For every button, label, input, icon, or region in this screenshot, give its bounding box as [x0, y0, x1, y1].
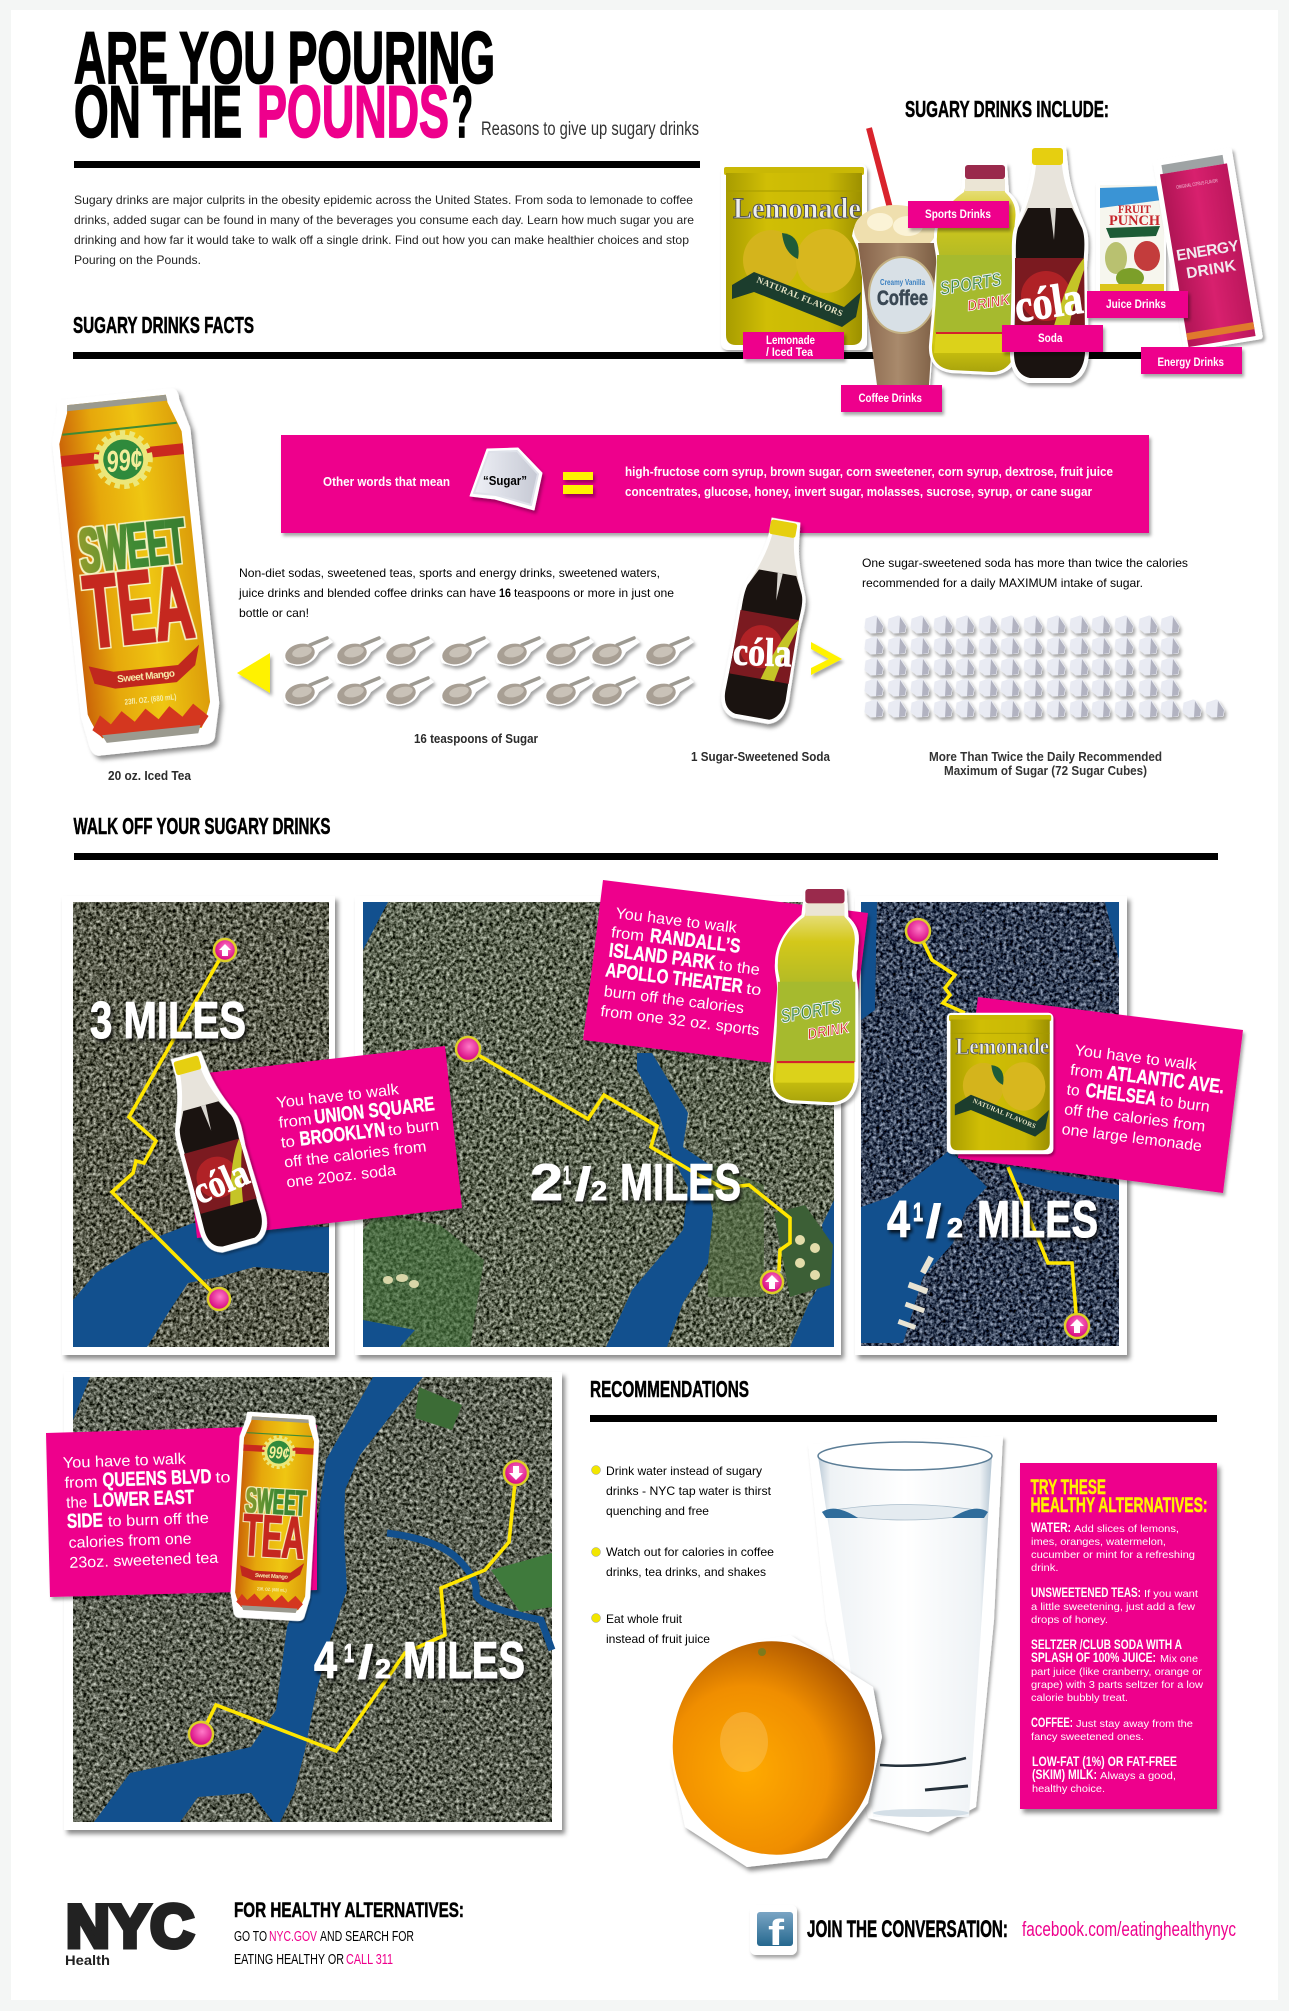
text: teaspoons explanation: juice drinks and blended coffee drinks can have — [238, 586, 496, 600]
label: coffee drinks: Coffee Drinks — [858, 391, 922, 405]
text: teaspoons explanation: bottle or can! — [239, 606, 309, 620]
distance: 4 1/2 miles (lemonade) — [887, 1191, 1098, 1249]
callout: atlantic ave — [958, 997, 1243, 1193]
pin: start — [214, 939, 236, 961]
heading: try these — [1030, 1476, 1208, 1517]
pin: end — [189, 1722, 213, 1746]
bullet: whole fruit: instead of fruit juice — [606, 1632, 710, 1646]
callout: union square: from — [278, 1111, 313, 1132]
callout: randall's island: You have to walk — [615, 905, 738, 937]
route line — [207, 1473, 516, 1751]
label: energy drinks: Energy Drinks — [1158, 355, 1224, 369]
intro text: Sugary drinks are major culprits in the obesity epidemic across the United States. From soda to lemonade to coffee — [74, 194, 693, 207]
icon: large sweet tea can — [48, 387, 223, 757]
text: teaspoons explanation — [238, 566, 674, 620]
icon: sweet tea can on map: SWEET — [244, 1481, 307, 1523]
footer: healthy alternatives: AND SEARCH FOR — [320, 1928, 414, 1945]
footer: healthy alternatives: GO TO — [234, 1928, 267, 1945]
distance: 2 1/2 miles: / — [575, 1158, 591, 1210]
callout: randall's island: from one 32 oz. sports — [599, 1003, 761, 1039]
callout: queens blvd: from — [64, 1474, 98, 1492]
distance: 4 1/2 miles (lemonade): MILES — [977, 1191, 1098, 1249]
icon: cola bottle — [1010, 146, 1089, 383]
pin: end — [208, 1288, 230, 1310]
icon: juice box: FRUIT — [1118, 202, 1151, 216]
icon: sports drink on map: DRINK — [806, 1019, 851, 1043]
intro text: drinking and how far it would take to walk off a single drink. Find out how you can make healthier choices and stop — [74, 234, 689, 247]
icon: sugar cube with label: “Sugar” — [483, 473, 527, 488]
icon: facebook — [750, 1905, 797, 1955]
caption: 1 soda: 1 Sugar-Sweetened Soda — [691, 749, 831, 764]
label: coffee drinks — [841, 385, 942, 412]
icon: cola bottle on map — [155, 1048, 271, 1255]
text: unsweetened teas: drops of honey. — [1031, 1614, 1108, 1626]
panel: other words for sugar: Other words that mean — [323, 474, 450, 489]
text: teaspoons explanation: teaspoons or more in just one — [514, 586, 674, 600]
text: water: drink. — [1031, 1562, 1058, 1574]
arrow: greater-than sign — [811, 642, 842, 675]
callout: randall's island: ISLAND PARK — [608, 940, 717, 975]
text: sugar synonyms: high-fructose corn syrup, brown sugar, corn sweetener, corn syrup, dextrose, fruit juice — [625, 464, 1113, 479]
distance: 4 1/2 miles (lemonade): 4 — [887, 1191, 910, 1249]
callout: atlantic ave: You have to walk — [1074, 1042, 1198, 1074]
icon: energy drink: ENERGY — [1175, 238, 1241, 265]
icon: large sweet tea can: 99¢ — [105, 443, 144, 479]
panel: try these healthy alternatives — [1020, 1463, 1217, 1809]
text: soda explanation: recommended for a daily MAXIMUM intake of sugar. — [862, 576, 1143, 590]
icon: large sweet tea can: Sweet Mango — [117, 668, 176, 685]
callout: atlantic ave: CHELSEA — [1084, 1080, 1158, 1110]
callout: queens blvd: the — [66, 1494, 88, 1512]
distance: 4 1/2 miles (tea): 2 — [375, 1654, 391, 1684]
icon: cola bottle (sugar comparison): cóla — [732, 629, 792, 675]
text: water: WATER: — [1031, 1519, 1071, 1535]
heading: sugary drinks facts: SUGARY DRINKS FACTS — [73, 312, 254, 338]
bullet: drink water: Drink water instead of sugary — [606, 1464, 762, 1478]
icon: sugar cube with label — [470, 448, 542, 510]
icons: 16 teaspoons of sugar — [283, 635, 694, 707]
footer: join the conversation: JOIN THE CONVERSATION: — [807, 1916, 1008, 1943]
callout: union square: BROOKLYN — [298, 1119, 386, 1151]
icon: sports drink on map — [770, 887, 859, 1105]
panel: other words for sugar — [281, 435, 1149, 533]
callout: queens blvd: QUEENS BLVD — [102, 1466, 212, 1492]
icon: coffee drink — [852, 128, 942, 385]
text: seltzer — [1031, 1636, 1203, 1704]
distance: 4 1/2 miles (tea): / — [358, 1636, 373, 1688]
icon: sweet tea can on map — [229, 1411, 321, 1622]
icon: sports drink on map: SPORTS — [779, 997, 843, 1028]
icon: glass of water — [808, 1436, 1003, 1832]
title: POUNDS — [257, 72, 449, 153]
intro text — [74, 194, 694, 267]
icon: sports drink: SPORTS — [938, 269, 1003, 300]
label: soda — [1002, 325, 1103, 352]
text: milk: Always a good, — [1100, 1770, 1176, 1782]
callout: union square: UNION SQUARE — [313, 1093, 436, 1129]
bullet: drink water — [592, 1464, 772, 1518]
text: coffee — [1031, 1714, 1193, 1743]
icon: juice box: PUNCH — [1109, 213, 1160, 229]
icon: facebook: f — [768, 1912, 785, 1953]
label: energy drinks — [1141, 347, 1242, 374]
callout: union square: You have to walk — [276, 1081, 400, 1112]
recommendations rule — [590, 1415, 1217, 1422]
walk off rule — [74, 853, 1218, 860]
callout: atlantic ave: one large lemonade — [1061, 1121, 1203, 1155]
distance: 4 1/2 miles (tea): 1 — [344, 1638, 354, 1668]
text: water: Add slices of lemons, — [1074, 1523, 1179, 1535]
callout: atlantic ave: to burn — [1159, 1093, 1211, 1116]
distance: 2 1/2 miles: 1 — [563, 1160, 571, 1190]
icon: lemonade can on map: NATURAL FLAVORS — [972, 1098, 1037, 1131]
callout: union square: off the calories from — [283, 1138, 427, 1171]
footer: healthy alternatives: EATING HEALTHY OR — [234, 1951, 344, 1968]
callout: union square: one 20oz. soda — [286, 1162, 397, 1191]
callout: randall's island — [583, 880, 868, 1072]
icon: equals sign — [563, 472, 593, 494]
distance: 2 1/2 miles: 2 — [530, 1154, 563, 1212]
icons: 72 sugar cubes — [865, 616, 1224, 717]
text: coffee: Just stay away from the — [1076, 1718, 1193, 1730]
footer: healthy alternatives: FOR HEALTHY ALTERNATIVES: — [234, 1899, 464, 1922]
bullet: drink water: drinks - NYC tap water is thirst — [606, 1484, 772, 1498]
text: coffee: fancy sweetened ones. — [1031, 1731, 1144, 1743]
text: water — [1031, 1519, 1195, 1574]
distance: 4 1/2 miles (lemonade): / — [926, 1195, 941, 1247]
text: milk: LOW-FAT (1%) OR FAT-FREE — [1032, 1753, 1177, 1769]
callout: queens blvd — [46, 1425, 317, 1597]
icon: lemonade can: Lemonade — [733, 192, 861, 225]
bullet: whole fruit: Eat whole fruit — [606, 1612, 683, 1626]
text: unsweetened teas: If you want — [1144, 1588, 1198, 1600]
label: lemonade / iced tea: / Iced Tea — [766, 345, 813, 359]
route line — [918, 931, 1076, 1313]
label: juice drinks: Juice Drinks — [1106, 297, 1166, 311]
callout: randall's island: burn off the calories — [603, 983, 745, 1017]
text: unsweetened teas: a little sweetening, just add a few — [1031, 1601, 1195, 1613]
icon: orange — [653, 1622, 895, 1874]
distance: 4 1/2 miles (tea) — [314, 1632, 525, 1690]
icon: energy drink — [1153, 147, 1263, 352]
label: lemonade / iced tea — [743, 332, 844, 359]
icon: coffee drink: Coffee — [877, 287, 928, 310]
callout: randall's island: to — [745, 981, 762, 999]
panel: map 4 1/2 miles — [855, 896, 1127, 1355]
icon: energy drink: DRINK — [1185, 257, 1238, 282]
icon: large sweet tea can: TEA — [79, 544, 199, 671]
caption: 16 teaspoons: 16 teaspoons of Sugar — [414, 731, 538, 746]
panel: map 2 1/2 miles — [355, 896, 841, 1355]
title: ARE YOU POURING — [74, 18, 495, 99]
intro text: drinks, added sugar can be found in many of the beverages you consume each day. Learn how much sugar you are — [74, 214, 694, 227]
icon: lemonade can: NATURAL FLAVORS — [755, 275, 844, 318]
route line — [468, 1049, 790, 1282]
text: seltzer: SELTZER /CLUB SODA WITH A — [1031, 1636, 1182, 1652]
callout: randall's island: RANDALL’S — [649, 925, 742, 958]
distance: 4 1/2 miles (tea): 4 — [314, 1632, 337, 1690]
callout: union square: to burn — [387, 1117, 440, 1139]
callout: union square — [180, 1046, 462, 1238]
pin: start — [906, 919, 930, 943]
distance: 2 1/2 miles — [530, 1154, 741, 1212]
header rule — [74, 161, 700, 168]
text: coffee: COFFEE: — [1031, 1714, 1073, 1730]
logo: NYC Health: Health — [65, 1952, 110, 1968]
bullet: watch calories — [592, 1545, 774, 1579]
footer: healthy alternatives — [234, 1899, 464, 1968]
title — [74, 18, 495, 153]
callout: randall's island: APOLLO THEATER — [604, 959, 744, 998]
caption: 72 sugar cubes: Maximum of Sugar (72 Sugar Cubes) — [944, 763, 1147, 778]
icon: coffee drink: Creamy Vanilla — [880, 278, 925, 287]
pin: end — [761, 1271, 783, 1293]
caption: iced tea: 20 oz. Iced Tea — [108, 768, 192, 783]
callout: atlantic ave: to — [1066, 1081, 1081, 1100]
text: teaspoons explanation: Non-diet sodas, sweetened teas, sports and energy drinks, sweetened waters, — [239, 566, 660, 580]
text: milk: healthy choice. — [1032, 1783, 1105, 1795]
bullet: whole fruit — [592, 1612, 710, 1646]
icon: sweet tea can on map: TEA — [241, 1501, 306, 1572]
route line — [112, 950, 225, 1299]
text: soda explanation: One sugar-sweetened soda has more than twice the calories — [862, 556, 1188, 570]
icon: sweet tea can on map: 23fl. OZ. (680 mL) — [257, 1586, 287, 1593]
heading: sugary drinks include: SUGARY DRINKS INCLUDE: — [905, 96, 1109, 122]
text: seltzer: SPLASH OF 100% JUICE: — [1031, 1649, 1156, 1665]
pin: end — [1065, 1314, 1089, 1338]
text: teaspoons explanation: 16 — [499, 586, 511, 600]
label: soda: Soda — [1038, 331, 1063, 345]
icon: lemonade can — [721, 164, 867, 350]
icon: lemonade can on map: Lemonade — [956, 1033, 1049, 1059]
callout: randall's island: from — [610, 924, 645, 945]
callout: union square: to — [280, 1133, 296, 1152]
label: lemonade / iced tea: Lemonade — [766, 333, 815, 347]
pin: start — [456, 1037, 480, 1061]
callout: queens blvd: LOWER EAST — [93, 1486, 194, 1512]
text: seltzer: grape) with 3 parts seltzer for a low — [1031, 1679, 1203, 1691]
footer: healthy alternatives: CALL 311 — [346, 1951, 393, 1968]
callout: queens blvd: SIDE — [66, 1510, 103, 1533]
icon: sweet tea can on map: 99¢ — [268, 1443, 290, 1463]
title: ? — [452, 72, 473, 153]
pin: start — [504, 1461, 528, 1485]
icon: large sweet tea can: 23fl. OZ. (680 mL) — [124, 692, 177, 707]
text: sugar synonyms — [625, 464, 1113, 499]
icon: sports drink: DRINK — [966, 291, 1012, 315]
distance: 2 1/2 miles: MILES — [620, 1154, 741, 1212]
logo: NYC Health: NYC — [66, 1893, 194, 1960]
callout: queens blvd: calories from one — [68, 1531, 192, 1552]
icon: cola bottle (sugar comparison) — [718, 514, 820, 727]
list: recommendations — [592, 1464, 774, 1646]
text: seltzer: calorie bubbly treat. — [1031, 1692, 1128, 1704]
callout: randall's island: to the — [718, 957, 761, 979]
text: seltzer: part juice (like cranberry, orange or — [1031, 1666, 1203, 1678]
icon: cola bottle: cóla — [1011, 272, 1086, 332]
text: sugar synonyms: concentrates, glucose, honey, invert sugar, molasses, sucrose, syrup, or cane sugar — [625, 484, 1092, 499]
heading: recommendations: RECOMMENDATIONS — [590, 1376, 749, 1402]
icon: juice box — [1096, 182, 1166, 294]
distance: 4 1/2 miles (lemonade): 2 — [947, 1213, 963, 1243]
caption: 72 sugar cubes: More Than Twice the Daily Recommended — [929, 749, 1162, 764]
bullet: watch calories: Watch out for calories in coffee — [606, 1545, 774, 1559]
facts rule — [73, 352, 1148, 359]
intro text: Pouring on the Pounds. — [74, 254, 201, 267]
callout: atlantic ave: ATLANTIC AVE. — [1106, 1062, 1225, 1098]
heading: try these: TRY THESE — [1030, 1476, 1106, 1499]
text: milk: (SKIM) MILK: — [1032, 1766, 1097, 1782]
text: water: cucumber or mint for a refreshing — [1031, 1549, 1195, 1561]
callout: queens blvd: to — [215, 1469, 231, 1487]
text: milk — [1032, 1753, 1177, 1795]
label: sports drinks — [908, 201, 1009, 228]
distance: 2 1/2 miles: 2 — [591, 1176, 607, 1206]
text: water: imes, oranges, watermelon, — [1031, 1536, 1166, 1548]
callout: atlantic ave: off the calories from — [1063, 1101, 1206, 1135]
icon: lemonade can on map — [947, 1013, 1053, 1154]
heading: walk off: WALK OFF YOUR SUGARY DRINKS — [74, 813, 330, 839]
icon: energy drink: ORIGINAL CITRUS FLAVOR — [1176, 178, 1219, 191]
bullet: drink water: quenching and free — [606, 1504, 709, 1518]
icon: large sweet tea can: SWEET — [76, 507, 189, 586]
title: ON THE — [74, 72, 242, 153]
text: unsweetened teas — [1031, 1584, 1198, 1626]
panel: map 3 miles — [62, 896, 335, 1355]
footer: healthy alternatives: NYC.GOV — [269, 1928, 317, 1945]
bullet: watch calories: drinks, tea drinks, and shakes — [606, 1565, 766, 1579]
text: unsweetened teas: UNSWEETENED TEAS: — [1031, 1584, 1141, 1600]
subtitle: Reasons to give up sugary drinks — [481, 119, 699, 140]
text: soda explanation — [862, 556, 1188, 590]
icon: sports drink — [929, 163, 1020, 375]
label: sports drinks: Sports Drinks — [925, 207, 991, 221]
callout: queens blvd: 23oz. sweetened tea — [69, 1550, 219, 1572]
panel: map queens to lower east side — [64, 1372, 562, 1830]
distance: 3 miles: 3 MILES — [90, 992, 246, 1050]
callout: atlantic ave: from — [1069, 1062, 1104, 1083]
caption: 72 sugar cubes — [929, 749, 1162, 778]
icon: sweet tea can on map: Sweet Mango — [255, 1573, 289, 1581]
label: juice drinks — [1087, 291, 1188, 318]
distance: 4 1/2 miles (tea): MILES — [403, 1632, 525, 1690]
callout: queens blvd: to burn off the — [108, 1510, 209, 1530]
arrow: yellow triangle pointing to tea — [237, 653, 270, 693]
callout: queens blvd: You have to walk — [63, 1451, 186, 1472]
text: seltzer: Mix one — [1160, 1653, 1198, 1665]
icon: cola bottle on map: cóla — [187, 1152, 255, 1213]
distance: 4 1/2 miles (lemonade): 1 — [913, 1197, 923, 1227]
